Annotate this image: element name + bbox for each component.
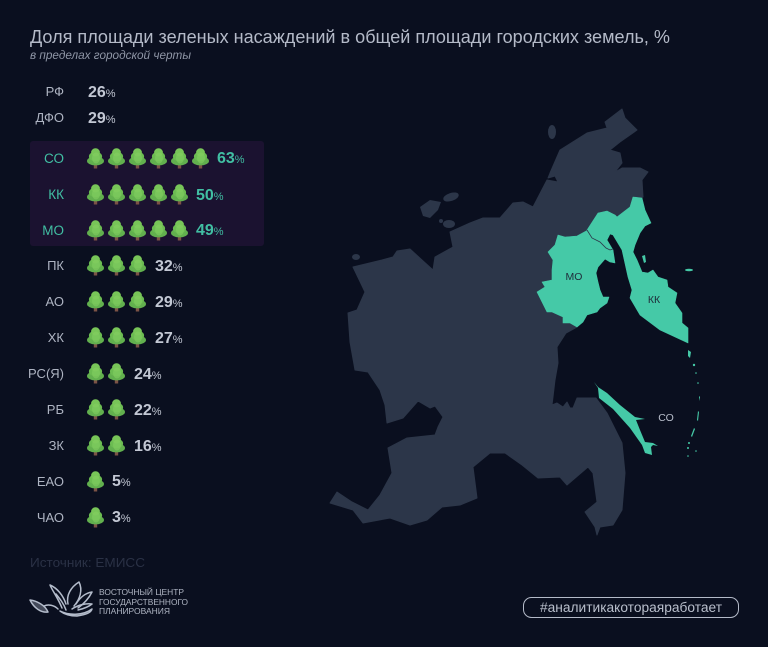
row: ЕАО: ЕАО: [37, 474, 64, 489]
row: АО: [46, 291, 183, 312]
row: СО: СО: [44, 151, 64, 166]
region: Камчатский край: [587, 197, 688, 343]
row: ЗК: [49, 435, 162, 456]
row: ДФО: 29%: [88, 110, 116, 127]
icon: lotus: [30, 582, 92, 616]
row: РБ: РБ: [47, 402, 64, 417]
map label: СО: СО: [658, 412, 674, 424]
region: Магаданская область: [537, 230, 615, 327]
row: КК: КК: [48, 187, 64, 202]
row: ПК: ПК: [47, 258, 64, 273]
row: МО: [42, 220, 224, 240]
highlight panel: [30, 141, 264, 246]
row: ПК: [47, 255, 183, 276]
row: МО: МО: [42, 223, 64, 238]
hashtag pill: [524, 598, 738, 618]
row: ДФО: [35, 110, 116, 127]
row: ЗК: ЗК: [49, 438, 64, 453]
row: СО: 63%: [217, 150, 245, 167]
row: РБ: [47, 399, 162, 420]
title: Доля площади зеленых насаждений в общей площади городских земель, %: [30, 26, 670, 47]
map label: МО: МО: [566, 271, 582, 283]
region: Сахалинская область: [594, 382, 658, 455]
row: АО: 29%: [155, 294, 183, 311]
map label: КК: КК: [648, 294, 661, 306]
row: ЕАО: [37, 471, 131, 492]
row: ДФО: ДФО: [35, 110, 64, 125]
source: Источник: ЕМИСС: [30, 555, 145, 570]
row: РС(Я): РС(Я): [28, 366, 64, 381]
row: РС(Я): [28, 363, 162, 384]
region: border: [587, 230, 613, 250]
row: ЗК: 16%: [134, 438, 162, 455]
row: РФ: [46, 84, 116, 101]
region: mainland: [330, 109, 648, 535]
organization name: [99, 586, 188, 616]
row: РФ: 26%: [88, 84, 116, 101]
organization name: ГОСУДАРСТВЕННОГО: [99, 597, 188, 607]
row: МО: 49%: [196, 222, 224, 239]
hashtag pill: #аналитикакотораяработает: [540, 600, 722, 615]
row: РБ: 22%: [134, 402, 162, 419]
row: РС(Я): 24%: [134, 366, 162, 383]
row: ЧАО: 3%: [112, 509, 131, 526]
row: ПК: 32%: [155, 258, 183, 275]
row: ХК: [48, 327, 183, 348]
row: РФ: РФ: [46, 84, 64, 99]
region: Kuril islands: [687, 350, 700, 457]
subtitle: в пределах городской черты: [30, 50, 192, 62]
row: ХК: ХК: [48, 330, 64, 345]
row: ЧАО: [37, 507, 131, 528]
row: КК: 50%: [196, 187, 224, 204]
row: ЧАО: ЧАО: [37, 510, 64, 525]
region: islands: [352, 125, 556, 260]
organization name: ПЛАНИРОВАНИЯ: [99, 606, 170, 616]
row: ЕАО: 5%: [112, 473, 131, 490]
row: АО: АО: [46, 294, 64, 309]
row: КК: [48, 184, 224, 204]
organization name: ВОСТОЧНЫЙ ЦЕНТР: [99, 586, 184, 597]
map: [330, 109, 700, 535]
row: СО: [44, 148, 245, 168]
row: ХК: 27%: [155, 330, 183, 347]
logo: [30, 582, 188, 616]
